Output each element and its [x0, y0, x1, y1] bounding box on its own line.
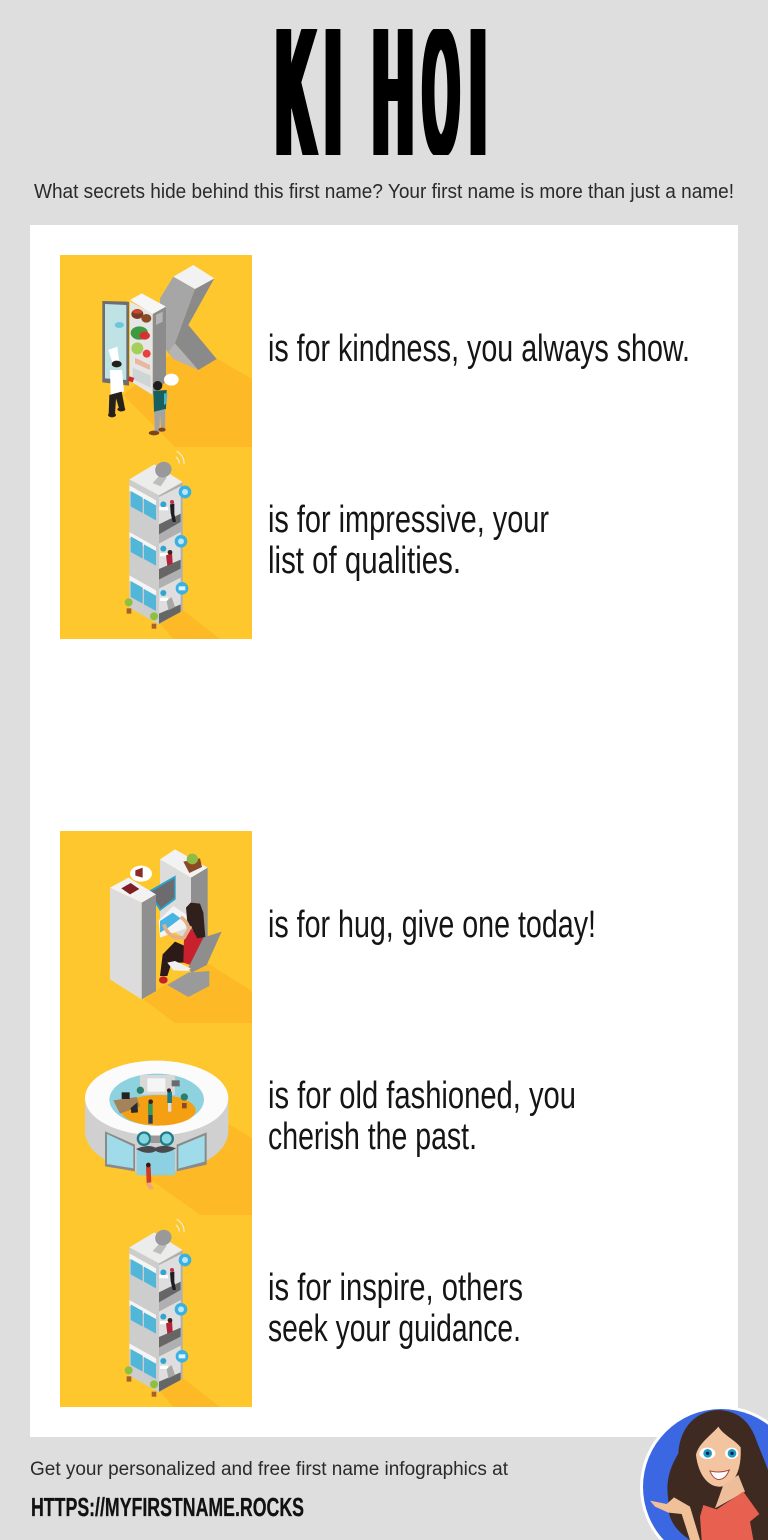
caption: I (inspire): is for inspire, others: [268, 1267, 523, 1309]
title: [276, 29, 486, 155]
illustration: letter I office tower: [60, 447, 252, 639]
caption: I (inspire): seek your guidance.: [268, 1308, 521, 1350]
caption: O: cherish the past.: [268, 1116, 477, 1158]
white content panel: [30, 225, 738, 1437]
caption: O: [268, 1075, 576, 1158]
caption: I, line block: [268, 499, 549, 582]
subtitle: What secrets hide behind this first name? Your first name is more than just a name!: [34, 181, 734, 203]
footer link: HTTPS://MYFIRSTNAME.ROCKS: [31, 1492, 304, 1522]
illustration: letter O optician: [60, 1023, 252, 1215]
avatar: cartoon woman in blue circle: [640, 1406, 768, 1540]
illustration: letter I office tower (repeat): [60, 1215, 252, 1407]
caption: H: is for hug, give one today!: [268, 904, 596, 946]
illustration: letter H desk: [60, 831, 252, 1023]
caption: I (inspire): [268, 1267, 523, 1350]
caption: I, line block: list of qualities.: [268, 540, 461, 582]
illustration: letter K with fridge: [60, 255, 252, 447]
caption: O: is for old fashioned, you: [268, 1075, 576, 1117]
caption: I, line block: is for impressive, your: [268, 499, 549, 541]
footer text: Get your personalized and free first name infographics at: [30, 1459, 509, 1480]
